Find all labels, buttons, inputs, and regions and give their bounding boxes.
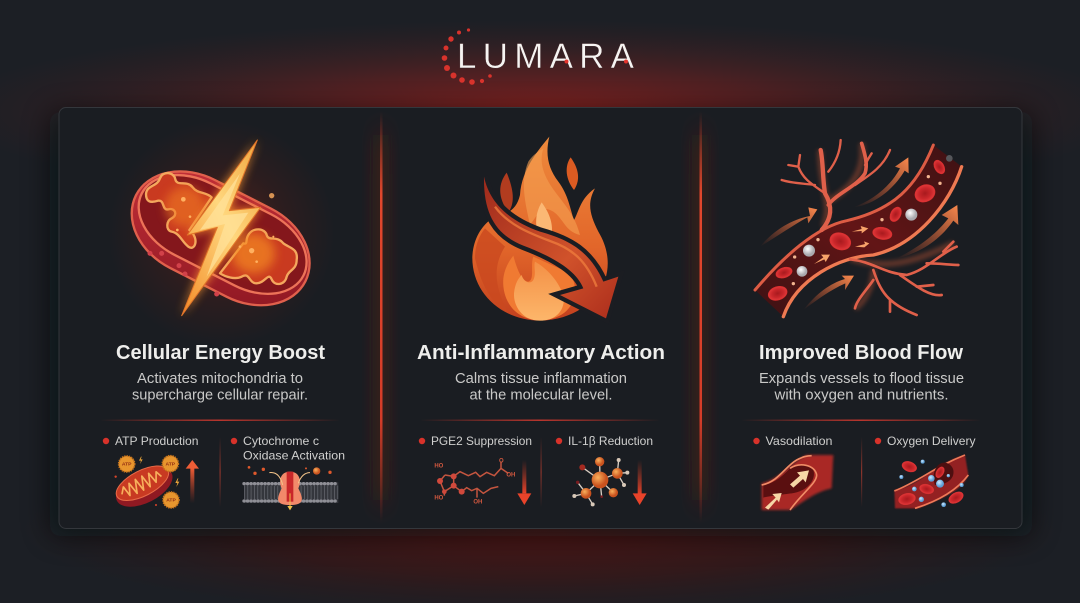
icon: small mitochondrion with ATP badges <box>109 456 199 515</box>
flow arrows <box>760 157 958 310</box>
heading: Cellular Energy Boost <box>116 342 325 364</box>
column divider right <box>680 112 720 522</box>
icon: PGE2 molecule <box>434 458 531 506</box>
metric: IL-1beta reduction <box>556 434 653 506</box>
metric: ATP production: ATP Production <box>115 434 198 448</box>
description: at the molecular level. <box>470 388 612 404</box>
metric: IL-1beta reduction: IL-1β Reduction <box>568 434 653 448</box>
logo dots <box>442 28 492 85</box>
heading: Improved Blood Flow <box>759 342 963 364</box>
logo <box>442 28 635 85</box>
description: Activates mitochondria to <box>137 371 303 387</box>
heading: Anti-Inflammatory Action <box>417 342 665 364</box>
icon: dilated vessel <box>762 455 833 510</box>
description: supercharge cellular repair. <box>132 388 308 404</box>
icon: flame with downward arrow <box>472 137 618 321</box>
icon: IL-1 beta molecule <box>572 457 647 506</box>
metric: cytochrome c oxidase: Cytochrome c <box>243 434 319 448</box>
metric: oxygen delivery <box>875 434 976 508</box>
icon: small mitochondrion with ATP badges: ATP <box>166 498 176 504</box>
column 3: blood flow <box>741 140 981 510</box>
metric: cytochrome c oxidase <box>231 434 345 510</box>
metric: vasodilation <box>753 434 833 510</box>
red blood cells <box>766 158 947 303</box>
metric: cytochrome c oxidase: Oxidase Activation <box>243 448 345 462</box>
metric: vasodilation: Vasodilation <box>766 434 832 448</box>
column 1: cellular energy <box>100 120 345 515</box>
icon: small mitochondrion with ATP badges: ATP <box>122 462 132 468</box>
cristae lobes <box>146 173 212 248</box>
description: Expands vessels to flood tissue <box>759 371 964 387</box>
metric: PGE2 suppression <box>419 434 532 506</box>
description <box>455 371 627 404</box>
icon: mitochondrion with lightning bolt <box>108 120 335 347</box>
description <box>132 371 308 404</box>
icon: PGE2 molecule: HO <box>434 496 444 502</box>
column divider left <box>361 112 401 522</box>
icon: blood vessel with cells and flow arrows <box>755 140 962 317</box>
icon: membrane protein <box>244 466 338 510</box>
branches <box>782 140 958 315</box>
metric: PGE2 suppression: PGE2 Suppression <box>431 434 532 448</box>
white blood cells <box>803 245 815 257</box>
description <box>759 371 964 404</box>
icon: small mitochondrion with ATP badges: ATP <box>166 461 176 467</box>
logo wordmark: LUMARA <box>457 37 635 76</box>
metric: ATP production <box>103 434 199 515</box>
icon: PGE2 molecule: OH <box>473 500 482 506</box>
column 2: anti-inflammatory <box>417 137 665 507</box>
description: Calms tissue inflammation <box>455 371 627 387</box>
main card panel <box>50 108 1032 536</box>
icon: PGE2 molecule: OH <box>506 473 515 479</box>
icon: PGE2 molecule: O <box>499 458 504 464</box>
icon: vessel with oxygen bubbles <box>894 455 968 508</box>
icon: PGE2 molecule: HO <box>434 464 444 470</box>
metric: oxygen delivery: Oxygen Delivery <box>887 434 976 448</box>
description: with oxygen and nutrients. <box>773 388 948 404</box>
